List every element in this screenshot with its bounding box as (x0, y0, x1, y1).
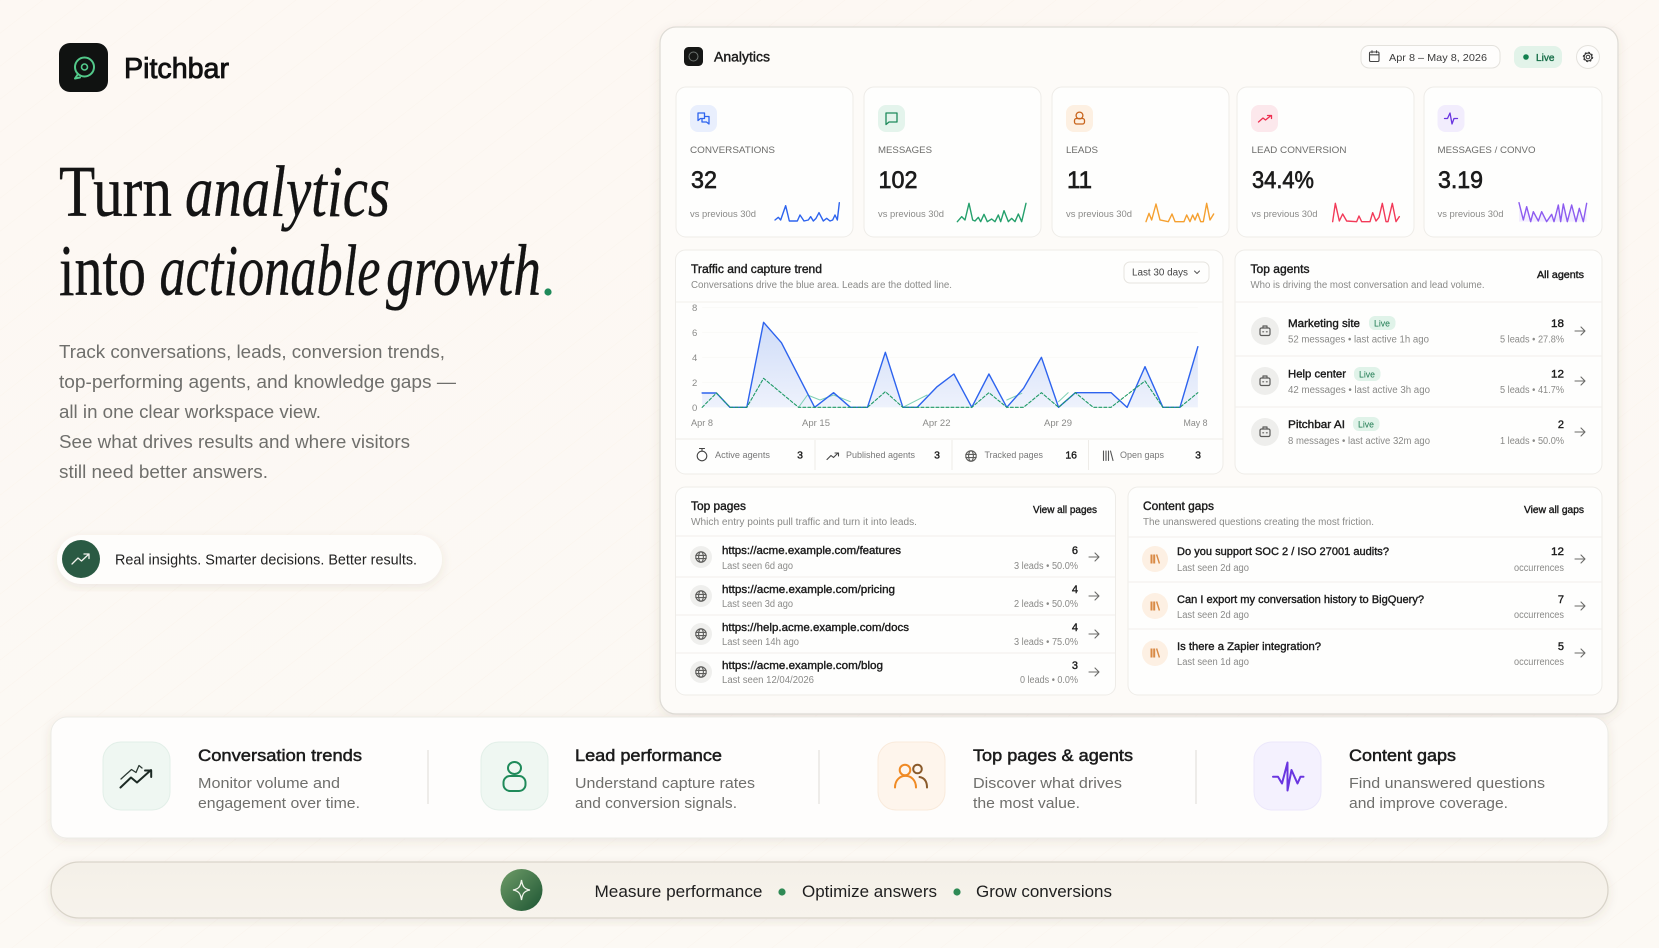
gap row: bigquery: Can I export my conversation history to BigQuery? (1177, 594, 1424, 606)
sparkline: messages per conversation (1519, 203, 1587, 222)
stat: published agents: Published agents (846, 450, 915, 461)
icon: activity (1438, 105, 1464, 132)
chart subtitle: Conversations drive the blue area. Leads are the dotted line. (691, 280, 952, 291)
line chart: 4 (692, 353, 697, 364)
feature: content gaps: Find unanswered questions (1349, 775, 1545, 792)
dashboard header (684, 46, 1600, 68)
pages subtitle: Which entry points pull traffic and turn it into leads. (691, 517, 917, 528)
date range pill: Apr 8 – May 8, 2026 (1389, 52, 1487, 64)
gap row: bigquery: occurrences (1514, 610, 1564, 621)
panel: content gaps (1128, 487, 1602, 695)
feature: lead performance: and conversion signals. (575, 795, 737, 812)
page row: docs: 3 leads • 75.0% (1014, 637, 1078, 648)
intro paragraph: still need better answers. (59, 461, 268, 482)
stat: open gaps: Open gaps (1120, 450, 1164, 461)
kpi card: conversations (676, 87, 853, 237)
gap row: soc 2: Do you support SOC 2 / ISO 27001 audits? (1177, 546, 1389, 558)
agent row: help center: 5 leads • 41.7% (1500, 385, 1564, 396)
agent row: pitchbar ai (1251, 417, 1585, 447)
agent row: marketing site (1251, 316, 1585, 346)
agent row: marketing site: 52 messages • last active 1h ago (1288, 334, 1430, 346)
kpi card: leads: LEADS (1066, 145, 1098, 156)
headline: Turn (59, 151, 172, 232)
line chart: 0 (692, 403, 697, 414)
icon: pulse (1254, 742, 1321, 810)
agent row: help center: 42 messages • last active 3h ago (1288, 385, 1431, 396)
callout: real insights (57, 535, 442, 584)
period dropdown (1124, 262, 1209, 283)
gap row: soc 2: occurrences (1514, 563, 1564, 574)
agents heading: Top agents (1250, 264, 1310, 276)
logo: Pitchbar (59, 43, 229, 92)
icon: trend (1251, 105, 1278, 132)
banner: benefits strip: Measure performance (594, 882, 762, 901)
line chart (691, 303, 1208, 429)
stat: open gaps (1104, 450, 1201, 462)
kpi card: conversations: vs previous 30d (690, 209, 756, 220)
intro paragraph: all in one clear workspace view. (59, 401, 321, 422)
kpi card: messages per conversation: 3.19 (1438, 167, 1483, 194)
kpi card: messages per conversation: vs previous 30d (1438, 209, 1504, 220)
panel: analytics dashboard (660, 27, 1618, 714)
icon: sparkle orb (500, 869, 542, 911)
icon: trend up (62, 540, 100, 578)
feature: top pages and agents (878, 742, 1133, 812)
icon: settings gear (1576, 46, 1600, 68)
panel: top agents (1235, 250, 1602, 474)
feature: conversation trends: Monitor volume and (198, 775, 340, 792)
agent row: help center: Help center (1288, 368, 1346, 380)
line chart: 2 (692, 378, 697, 389)
agent row: help center: Live (1359, 370, 1375, 380)
gap row: soc 2: Last seen 2d ago (1177, 563, 1250, 574)
gap row: zapier: Is there a Zapier integration? (1177, 641, 1321, 653)
intro paragraph (59, 341, 457, 482)
banner: benefits strip (51, 862, 1608, 918)
intro paragraph: Track conversations, leads, conversion trends, (59, 341, 445, 362)
live badge: Live (1536, 52, 1555, 64)
gap row: zapier: occurrences (1514, 657, 1564, 668)
feature: content gaps (1254, 742, 1545, 812)
page row: docs: https://help.acme.example.com/docs (722, 622, 910, 634)
gap row: soc 2: 12 (1551, 546, 1564, 558)
feature: lead performance: Understand capture rates (575, 775, 755, 792)
headline: actionable (160, 230, 380, 311)
headline: growth (386, 230, 541, 311)
gaps heading: Content gaps (1143, 501, 1214, 513)
intro paragraph: top-performing agents, and knowledge gaps — (59, 371, 457, 392)
page row: features: Last seen 6d ago (722, 561, 794, 572)
agent row: pitchbar ai: Live (1358, 420, 1374, 430)
page row: docs: Last seen 14h ago (722, 637, 800, 648)
page row: pricing (690, 584, 1099, 610)
line chart: 6 (692, 328, 697, 339)
panel: traffic and capture trend (676, 250, 1223, 474)
feature: content gaps: Content gaps (1349, 746, 1456, 765)
agent row: marketing site: 5 leads • 27.8% (1500, 334, 1564, 346)
kpi card: messages: vs previous 30d (878, 209, 944, 220)
sparkline: conversations (775, 203, 839, 221)
page row: blog: https://acme.example.com/blog (722, 660, 883, 672)
page row: features: https://acme.example.com/features (722, 545, 902, 557)
period dropdown: Last 30 days (1132, 268, 1188, 278)
icon: lead (1066, 105, 1093, 132)
agent row: pitchbar ai: 8 messages • last active 32m ago (1288, 436, 1431, 447)
icon: person (481, 742, 548, 810)
gap row: soc 2 (1142, 546, 1585, 574)
page row: blog: 0 leads • 0.0% (1020, 675, 1078, 686)
stat: tracked pages: Tracked pages (984, 450, 1043, 461)
gap row: zapier (1142, 640, 1585, 668)
feature: lead performance (481, 742, 755, 812)
page row: pricing: 4 (1072, 584, 1078, 596)
icon: trend zigzag (103, 742, 170, 810)
page row: features: 3 leads • 50.0% (1014, 561, 1078, 572)
agent row: help center (1251, 367, 1585, 396)
kpi card: leads: 11 (1067, 167, 1092, 194)
page row: blog (690, 660, 1099, 686)
link: view all gaps: View all gaps (1524, 505, 1584, 516)
feature: top pages and agents: Top pages & agents (973, 746, 1133, 765)
stat: tracked pages: 16 (1065, 450, 1077, 462)
stat: published agents (827, 450, 940, 462)
link: view all pages: View all pages (1033, 505, 1097, 516)
kpi card: lead conversion: vs previous 30d (1252, 209, 1318, 220)
page row: features: 6 (1072, 545, 1078, 557)
kpi card: lead conversion: LEAD CONVERSION (1252, 145, 1347, 156)
date range pill (1361, 46, 1500, 68)
stat: tracked pages (966, 450, 1077, 462)
agents subtitle: Who is driving the most conversation and lead volume. (1250, 280, 1484, 291)
callout text: Real insights. Smarter decisions. Better results. (115, 552, 417, 568)
line chart: Apr 15 (802, 418, 830, 429)
gaps subtitle: The unanswered questions creating the most friction. (1143, 517, 1374, 528)
icon: analytics logo (684, 47, 703, 66)
agent row: pitchbar ai: 1 leads • 50.0% (1500, 436, 1564, 447)
headline: into (59, 230, 146, 311)
panel: top pages (676, 487, 1116, 695)
stat: active agents (697, 448, 803, 462)
kpi card: conversations: CONVERSATIONS (690, 145, 775, 156)
kpi card: messages: MESSAGES (878, 145, 932, 156)
agent row: pitchbar ai: 2 (1558, 419, 1564, 431)
page row: pricing: https://acme.example.com/pricing (722, 584, 895, 596)
page row: pricing: Last seen 3d ago (722, 599, 794, 610)
banner: benefits strip: Optimize answers (802, 882, 937, 901)
headline: analytics (185, 151, 390, 232)
panel: feature strip (51, 717, 1608, 838)
kpi card: messages: 102 (878, 167, 918, 194)
gap row: bigquery: 7 (1558, 594, 1564, 606)
agent row: marketing site: 18 (1551, 318, 1564, 330)
stat: open gaps: 3 (1195, 450, 1201, 462)
line chart: Apr 8 (691, 418, 713, 429)
sparkline: leads (1146, 203, 1214, 222)
chart heading: Traffic and capture trend (691, 264, 822, 276)
agent row: marketing site: Live (1374, 318, 1390, 328)
page row: features (690, 545, 1099, 572)
agent row: help center: 12 (1551, 368, 1564, 380)
kpi card: messages (864, 87, 1041, 237)
feature: top pages and agents: the most value. (973, 795, 1080, 812)
icon: message (878, 105, 905, 132)
feature: conversation trends (103, 742, 362, 812)
agent row: marketing site: Marketing site (1288, 318, 1360, 330)
agent row: pitchbar ai: Pitchbar AI (1288, 419, 1345, 431)
feature: lead performance: Lead performance (575, 746, 722, 765)
page row: docs: 4 (1072, 622, 1078, 634)
stat: active agents: 3 (797, 450, 803, 462)
kpi card: messages per conversation (1424, 87, 1602, 237)
stat: active agents: Active agents (715, 450, 770, 461)
icon: chat bubbles (690, 105, 717, 132)
live badge (1514, 46, 1562, 68)
link: all agents: All agents (1537, 270, 1584, 281)
dashboard title: Analytics (714, 50, 770, 64)
gap row: zapier: Last seen 1d ago (1177, 657, 1250, 668)
kpi card: lead conversion (1237, 87, 1414, 237)
headline (59, 151, 552, 311)
icon: people (878, 742, 945, 810)
sparkline: messages (957, 203, 1026, 222)
gap row: bigquery: Last seen 2d ago (1177, 610, 1250, 621)
feature: conversation trends: engagement over time. (198, 795, 360, 812)
kpi card: lead conversion: 34.4% (1252, 167, 1314, 194)
page row: pricing: 2 leads • 50.0% (1014, 599, 1078, 610)
gap row: zapier: 5 (1558, 641, 1564, 653)
line chart: 8 (692, 303, 697, 314)
page row: blog: 3 (1072, 660, 1078, 672)
kpi card: leads (1052, 87, 1229, 237)
brand name: Pitchbar (124, 53, 229, 85)
feature: top pages and agents: Discover what drives (973, 775, 1122, 792)
page row: blog: Last seen 12/04/2026 (722, 675, 815, 686)
feature: conversation trends: Conversation trends (198, 746, 362, 765)
kpi card: messages per conversation: MESSAGES / CONVO (1438, 145, 1536, 156)
line chart: Apr 29 (1044, 418, 1072, 429)
intro paragraph: See what drives results and where visitors (59, 431, 410, 452)
page row: docs (690, 622, 1099, 648)
pages heading: Top pages (691, 501, 746, 513)
line chart: Apr 22 (922, 418, 950, 429)
gap row: bigquery (1142, 593, 1585, 621)
line chart: May 8 (1184, 418, 1208, 429)
icon: logo mark (59, 43, 108, 92)
sparkline: lead conversion (1333, 203, 1399, 222)
kpi card: leads: vs previous 30d (1066, 209, 1132, 220)
stat: published agents: 3 (934, 450, 940, 462)
banner: benefits strip: Grow conversions (976, 882, 1112, 901)
kpi card: conversations: 32 (691, 167, 717, 194)
feature: content gaps: and improve coverage. (1349, 795, 1508, 812)
